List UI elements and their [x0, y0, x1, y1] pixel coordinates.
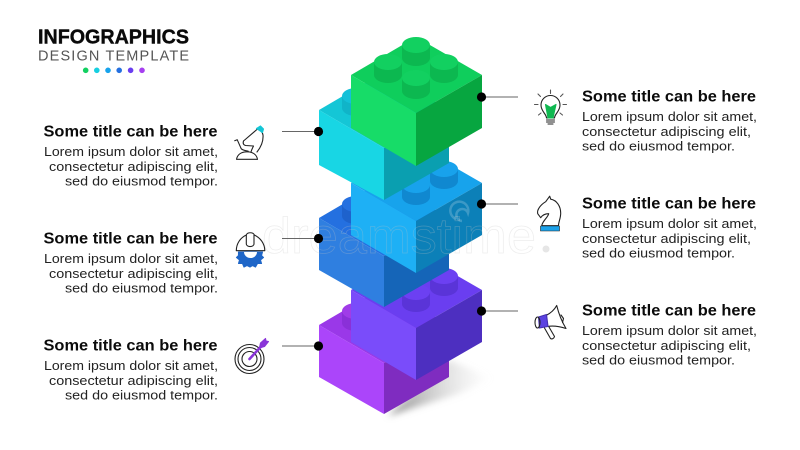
icon: microscope [235, 126, 264, 159]
right text 1: Some title can be here [582, 88, 756, 106]
icon: megaphone [535, 306, 566, 339]
left connectors [282, 127, 323, 351]
cyan brick [319, 72, 449, 200]
icon: light bulb [534, 90, 566, 124]
palette dots [83, 68, 145, 73]
title: INFOGRAPHICS [38, 26, 189, 48]
blue brick [319, 180, 449, 307]
right text 3: sed do eiusmod tempor. [582, 354, 735, 368]
left text 3: Lorem ipsum dolor sit amet, [44, 359, 218, 373]
left text 2 [44, 230, 218, 296]
left text 1: Lorem ipsum dolor sit amet, [44, 145, 218, 159]
right text 3: Some title can be here [582, 302, 756, 320]
left text 1 [44, 124, 218, 188]
right text 1: sed do eiusmod tempor. [582, 140, 735, 154]
left text 3: Some title can be here [44, 338, 218, 354]
right text 2: consectetur adipiscing elit, [582, 232, 751, 246]
purple brick [319, 287, 449, 414]
right text 1: consectetur adipiscing elit, [582, 125, 751, 139]
icon: target with arrow [235, 338, 268, 374]
right connectors [477, 92, 518, 316]
right text 2: sed do eiusmod tempor. [582, 246, 735, 260]
icon: chess knight [538, 196, 561, 231]
left text 3: consectetur adipiscing elit, [49, 374, 218, 388]
watermark: dreamstime [262, 208, 536, 264]
left text 1: sed do eiusmod tempor. [65, 174, 218, 188]
title: DESIGN TEMPLATE [38, 48, 189, 64]
brick tower [319, 37, 482, 414]
right text 3 [582, 302, 757, 368]
left text 2: Lorem ipsum dolor sit amet, [44, 252, 218, 266]
brick shadow [388, 360, 492, 416]
left text 3: sed do eiusmod tempor. [65, 388, 218, 402]
right text 3: Lorem ipsum dolor sit amet, [582, 324, 757, 338]
left text 2: Some title can be here [44, 230, 218, 248]
right text 3: consectetur adipiscing elit, [582, 339, 751, 353]
left text 1: Some title can be here [44, 124, 218, 140]
sky brick [351, 145, 482, 273]
icon: helmet and gear [236, 233, 265, 267]
left text 1: consectetur adipiscing elit, [49, 160, 218, 174]
left text 3 [44, 338, 218, 402]
right text 2 [582, 196, 757, 260]
right text 2: Lorem ipsum dolor sit amet, [582, 217, 757, 231]
right text 1: Lorem ipsum dolor sit amet, [582, 110, 757, 124]
left text 2: sed do eiusmod tempor. [65, 282, 218, 296]
left text 2: consectetur adipiscing elit, [49, 267, 218, 281]
title [38, 26, 189, 64]
violet brick [351, 252, 482, 380]
green brick [351, 37, 482, 166]
right text 1 [582, 88, 757, 154]
right text 2: Some title can be here [582, 196, 756, 212]
